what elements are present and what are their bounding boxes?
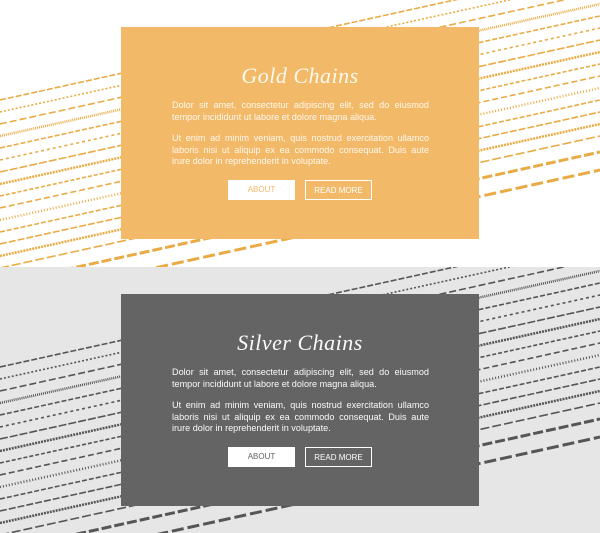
button: about	[228, 180, 295, 200]
button: read more	[305, 180, 372, 200]
panel: silver section	[0, 267, 600, 533]
button: read more: READ MORE	[314, 453, 363, 462]
button: read more	[305, 447, 372, 467]
chains: silver diagonal	[0, 267, 600, 533]
button: about: ABOUT	[248, 452, 275, 461]
text block: Dolor sit amet, consectetur adipiscing elit, sed do eiusmod tempor incididunt ut labore et dolore magna aliqua. Ut enim ad minim veniam, quis nostrud exercitation ullamco laboris nisi ut aliquip ex ea commodo consequat. Duis aute irure dolor in reprehenderit in voluptate.	[172, 367, 429, 433]
title: Silver Chains	[237, 330, 363, 355]
panel: silver card	[121, 294, 479, 506]
button: about: ABOUT	[248, 185, 275, 194]
panel: gold section	[0, 0, 600, 267]
panel: gold card	[121, 27, 479, 239]
chains: gold diagonal	[0, 0, 600, 267]
title: Gold Chains	[241, 63, 359, 88]
button: about	[228, 447, 295, 467]
text block: Dolor sit amet, consectetur adipiscing elit, sed do eiusmod tempor incididunt ut labore et dolore magna aliqua. Ut enim ad minim veniam, quis nostrud exercitation ullamco laboris nisi ut aliquip ex ea commodo consequat. Duis aute irure dolor in reprehenderit in voluptate.	[172, 100, 429, 166]
button: read more: READ MORE	[314, 186, 363, 195]
